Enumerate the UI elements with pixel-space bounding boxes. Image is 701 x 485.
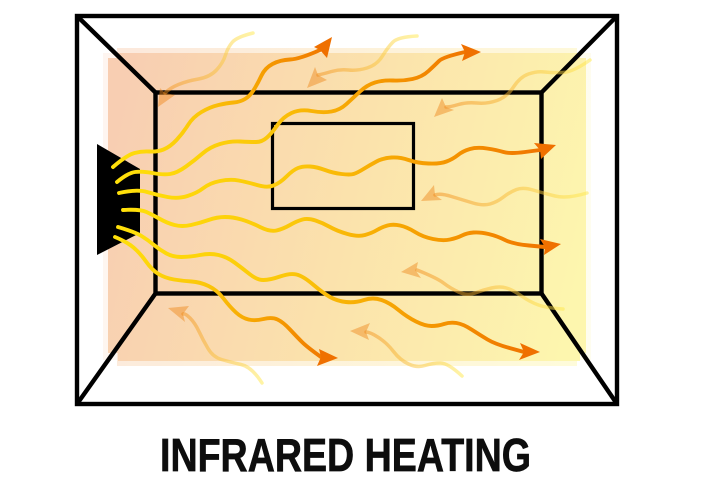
reflected wave top left (158, 33, 253, 107)
room wireframe (77, 16, 617, 404)
reflected wave top centre (307, 36, 417, 88)
reflected wave bottom centre (350, 323, 462, 376)
heat wave 3 (119, 143, 556, 198)
faded reflected heat waves (158, 33, 590, 383)
heat wave 2 (117, 44, 481, 182)
heat wave 5 (118, 227, 540, 360)
reflected wave lower right (401, 262, 563, 309)
reflected wave right (421, 185, 587, 205)
heat wave 4 (123, 210, 561, 255)
heat glow background (103, 48, 591, 366)
reflected wave bottom left (168, 306, 262, 383)
radiant heat waves with arrows (113, 37, 561, 366)
icon: wall heater (97, 144, 140, 255)
heat wave 6 (115, 237, 338, 366)
title: INFRARED HEATING (160, 429, 531, 481)
reflected wave upper right (434, 60, 590, 117)
heat wave 1 (113, 37, 332, 167)
